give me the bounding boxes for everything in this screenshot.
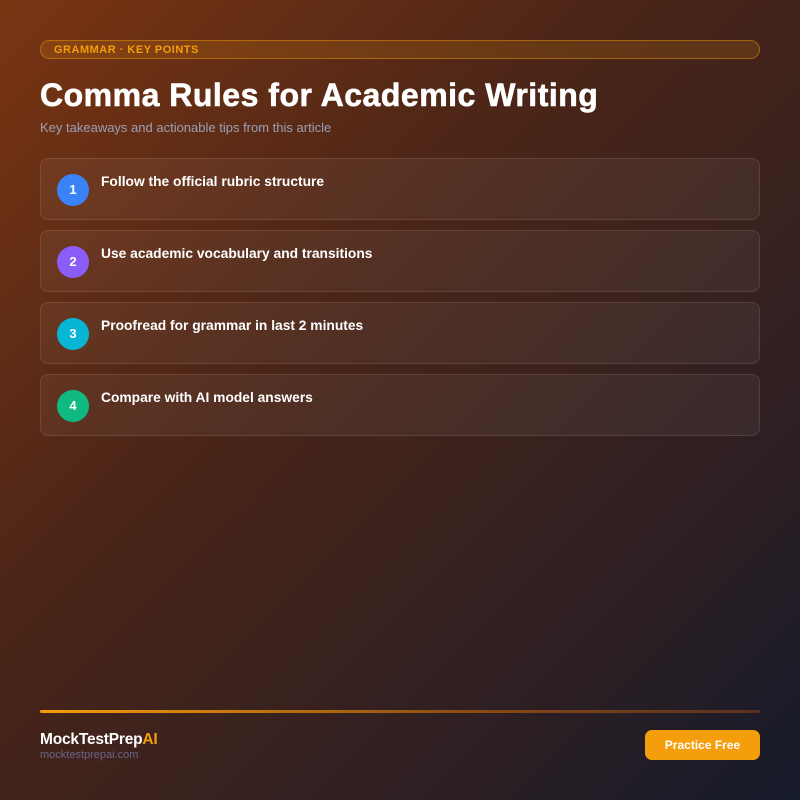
card 1 [40,158,760,220]
card 1: Follow the official rubric structure [101,174,324,189]
card 2: 2 [69,254,77,269]
card 3: Proofread for grammar in last 2 minutes [101,318,363,333]
title: Comma Rules for Academic Writing [40,77,598,113]
button [645,730,760,760]
subtitle: Key takeaways and actionable tips from this article [40,120,331,135]
badge: GRAMMAR · KEY POINTS [54,44,199,56]
card 4: Compare with AI model answers [101,390,313,405]
card 3 [40,302,760,364]
card 4: 4 [69,398,77,413]
card 2: Use academic vocabulary and transitions [101,246,372,261]
card 2 [40,230,760,292]
card 3: 3 [69,326,77,341]
badge [40,40,760,59]
button: Practice Free [665,738,740,752]
brand: MockTestPrepAI [40,731,158,748]
card 4 [40,374,760,436]
url: mocktestprepai.com [40,749,138,761]
card 1: 1 [69,182,77,197]
